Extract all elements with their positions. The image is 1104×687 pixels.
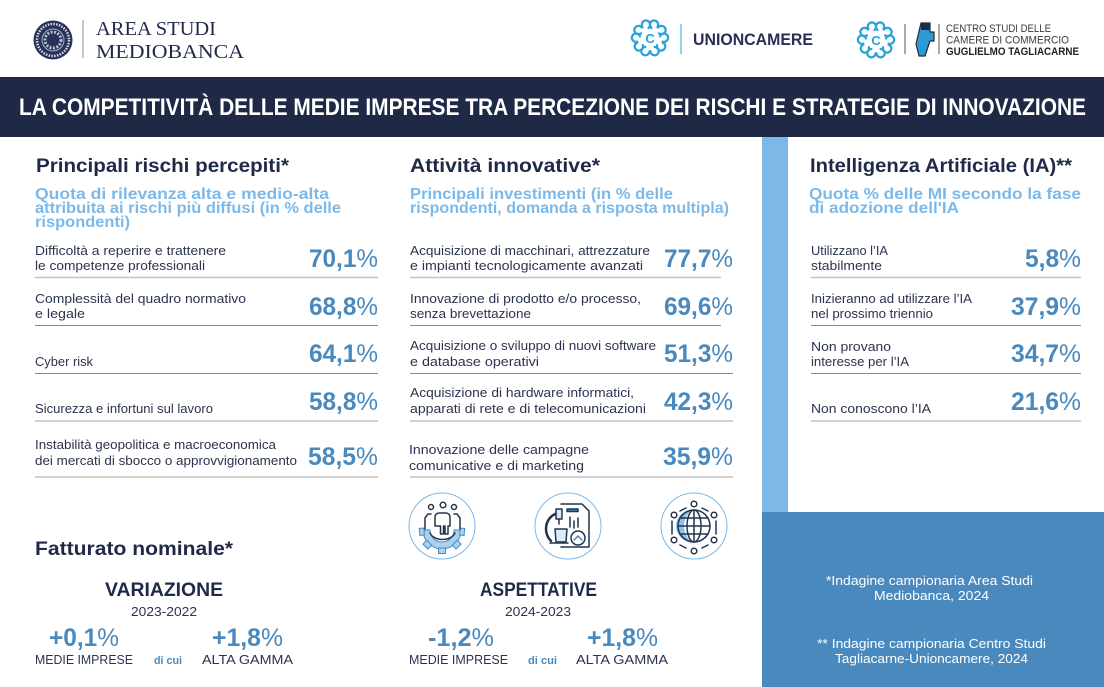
block: variazione: VARIAZIONE <box>105 580 223 601</box>
row: non interesse 34,7%: interesse per l’IA <box>811 355 910 369</box>
row: prossimo triennio 37,9% <box>811 292 1081 326</box>
subheading: IA: Quota % delle MI secondo la fase <box>809 186 1081 203</box>
panel: footnotes <box>762 512 1104 687</box>
block: variazione: +0,1% <box>49 624 119 652</box>
row: sicurezza 58,8%: Sicurezza e infortuni sul lavoro <box>35 402 213 416</box>
logo: Centro Studi Tagliacarne: GUGLIELMO TAGLIACARNE <box>946 46 1079 58</box>
panel: footnotes: Tagliacarne-Unioncamere, 2024 <box>835 652 1028 666</box>
row: macchinari 77,7%: Acquisizione di macchinari, attrezzature <box>410 244 650 258</box>
row: competenze 70,1%: 70,1% <box>309 245 378 273</box>
logo: Centro Studi Tagliacarne <box>857 22 1079 59</box>
icon: Camere di commercio swirl <box>857 22 895 59</box>
row: prodotto 69,6%: Innovazione di prodotto e/o processo, <box>410 292 641 306</box>
accent strip <box>762 137 788 512</box>
title banner <box>0 77 1104 137</box>
row: stabilmente 5,8%: 5,8% <box>1025 245 1081 273</box>
subheading: attività: rispondenti, domanda a risposta multipla) <box>410 200 729 217</box>
heading: IA: Intelligenza Artificiale (IA)** <box>810 156 1073 177</box>
row: non conoscono 21,6% <box>811 388 1081 421</box>
row: prossimo triennio 37,9%: nel prossimo triennio <box>811 307 933 321</box>
row: hardware 42,3%: Acquisizione di hardware informatici, <box>410 386 634 400</box>
panel: footnotes: ** Indagine campionaria Centro Studi <box>817 637 1046 651</box>
row: cyber risk 64,1%: 64,1% <box>309 340 378 368</box>
block: aspettative: ALTA GAMMA <box>576 652 668 667</box>
icon: Tagliacarne mark <box>916 23 934 56</box>
row: hardware 42,3%: apparati di rete e di telecomunicazioni <box>410 402 646 416</box>
logo: Centro Studi Tagliacarne: CAMERE DI COMMERCIO <box>946 34 1069 46</box>
subheading: rischi: attribuita ai rischi più diffusi (in % delle <box>35 200 341 217</box>
block: variazione: MEDIE IMPRESE <box>35 652 133 667</box>
panel: attività innovative <box>409 156 733 559</box>
block: aspettative: MEDIE IMPRESE <box>409 652 508 667</box>
row: software 51,3%: 51,3% <box>664 340 733 368</box>
row: competenze 70,1%: le competenze professionali <box>35 259 205 273</box>
block: aspettative: +1,8% <box>587 624 658 652</box>
icon: Mediobanca seal <box>34 20 72 60</box>
row: software 51,3%: e database operativi <box>410 355 539 369</box>
subheading: attività: Principali investimenti (in % delle <box>410 186 673 203</box>
row: prodotto 69,6% <box>410 292 733 326</box>
icon: Unioncamere swirl <box>631 20 669 57</box>
block: aspettative: 2024-2023 <box>505 604 571 619</box>
row: hardware 42,3% <box>410 386 733 421</box>
heading: fatturato: Fatturato nominale* <box>35 539 234 560</box>
row: non interesse 34,7%: 34,7% <box>1011 340 1081 368</box>
panel: intelligenza artificiale <box>809 156 1081 421</box>
row: prossimo triennio 37,9%: 37,9% <box>1011 293 1081 321</box>
row: stabilmente 5,8%: stabilmente <box>811 259 882 273</box>
row: sicurezza 58,8%: 58,8% <box>309 388 378 416</box>
block: aspettative: ASPETTATIVE <box>480 580 597 601</box>
row: prodotto 69,6%: 69,6% <box>664 293 733 321</box>
row: competenze 70,1%: Difficoltà a reperire e trattenere <box>35 244 226 258</box>
row: normativo 68,8%: Complessità del quadro normativo <box>35 292 246 306</box>
row: normativo 68,8%: 68,8% <box>309 293 378 321</box>
logo: Unioncamere <box>631 20 813 57</box>
panel: principali rischi percepiti <box>35 156 378 477</box>
row: hardware 42,3%: 42,3% <box>664 388 733 416</box>
logo: Area Studi Mediobanca: MEDIOBANCA <box>96 41 245 63</box>
row: geopolitica 58,5%: Instabilità geopolitica e macroeconomica <box>35 438 276 452</box>
row: competenze 70,1% <box>35 244 378 278</box>
row: geopolitica 58,5%: dei mercati di sbocco o approvvigionamento <box>35 454 297 468</box>
logo: Area Studi Mediobanca <box>34 18 245 63</box>
row: macchinari 77,7%: e impianti tecnologicamente avanzati <box>410 259 643 273</box>
block: variazione: 2023-2022 <box>131 604 197 619</box>
block: variazione <box>35 580 293 667</box>
block: variazione: di cui <box>154 655 182 667</box>
row: cyber risk 64,1%: Cyber risk <box>35 355 94 369</box>
subheading: rischi: Quota di rilevanza alta e medio-alta <box>35 186 329 203</box>
heading: attività: Attività innovative* <box>410 156 601 177</box>
row: geopolitica 58,5%: 58,5% <box>308 443 378 471</box>
panel: footnotes: Mediobanca, 2024 <box>874 589 989 603</box>
icon: microscope and report <box>535 493 601 559</box>
row: marketing 35,9% <box>409 443 733 477</box>
row: sicurezza 58,8% <box>35 388 378 421</box>
row: non interesse 34,7% <box>811 340 1081 374</box>
icon: Camere di commercio swirl: C <box>871 33 881 48</box>
logo: Area Studi Mediobanca: AREA STUDI <box>96 18 216 40</box>
heading: rischi: Principali rischi percepiti* <box>36 156 290 177</box>
subheading: attività <box>410 186 729 217</box>
row: non conoscono 21,6%: Non conoscono l’IA <box>811 402 932 416</box>
block: aspettative <box>409 580 668 667</box>
row: non conoscono 21,6%: 21,6% <box>1011 388 1081 416</box>
logo: Unioncamere: UNIONCAMERE <box>693 30 813 49</box>
row: marketing 35,9%: Innovazione delle campagne <box>409 443 589 457</box>
row: prodotto 69,6%: senza brevettazione <box>410 307 531 321</box>
row: marketing 35,9%: comunicative e di marketing <box>409 459 584 473</box>
row: macchinari 77,7%: 77,7% <box>664 245 733 273</box>
icon: globe network <box>661 493 727 559</box>
block: aspettative: -1,2% <box>428 624 494 652</box>
row: software 51,3%: Acquisizione o sviluppo di nuovi software <box>410 339 656 353</box>
row: non interesse 34,7%: Non provano <box>811 340 891 354</box>
row: normativo 68,8% <box>35 292 378 326</box>
panel: fatturato nominale <box>35 539 668 667</box>
icon: Unioncamere swirl: C <box>645 31 655 46</box>
row: marketing 35,9%: 35,9% <box>663 443 733 471</box>
row: prossimo triennio 37,9%: Inizieranno ad utilizzare l’IA <box>811 292 973 306</box>
block: variazione: ALTA GAMMA <box>202 652 293 667</box>
subheading: rischi <box>35 186 341 231</box>
row: software 51,3% <box>410 339 733 374</box>
subheading: rischi: rispondenti) <box>35 214 130 231</box>
row: stabilmente 5,8% <box>811 244 1081 278</box>
row: cyber risk 64,1% <box>35 340 378 374</box>
block: aspettative: di cui <box>528 655 557 667</box>
subheading: IA: di adozione dell'IA <box>809 200 959 217</box>
row: geopolitica 58,5% <box>35 438 378 477</box>
panel: footnotes: *Indagine campionaria Area Studi <box>826 574 1033 588</box>
row: macchinari 77,7% <box>410 244 733 278</box>
icon: people and gear <box>409 493 475 559</box>
row: normativo 68,8%: e legale <box>35 307 85 321</box>
block: variazione: +1,8% <box>212 624 283 652</box>
subheading: IA <box>809 186 1081 217</box>
logo: Centro Studi Tagliacarne: CENTRO STUDI DELLE <box>946 23 1051 35</box>
row: stabilmente 5,8%: Utilizzano l’IA <box>811 244 889 258</box>
